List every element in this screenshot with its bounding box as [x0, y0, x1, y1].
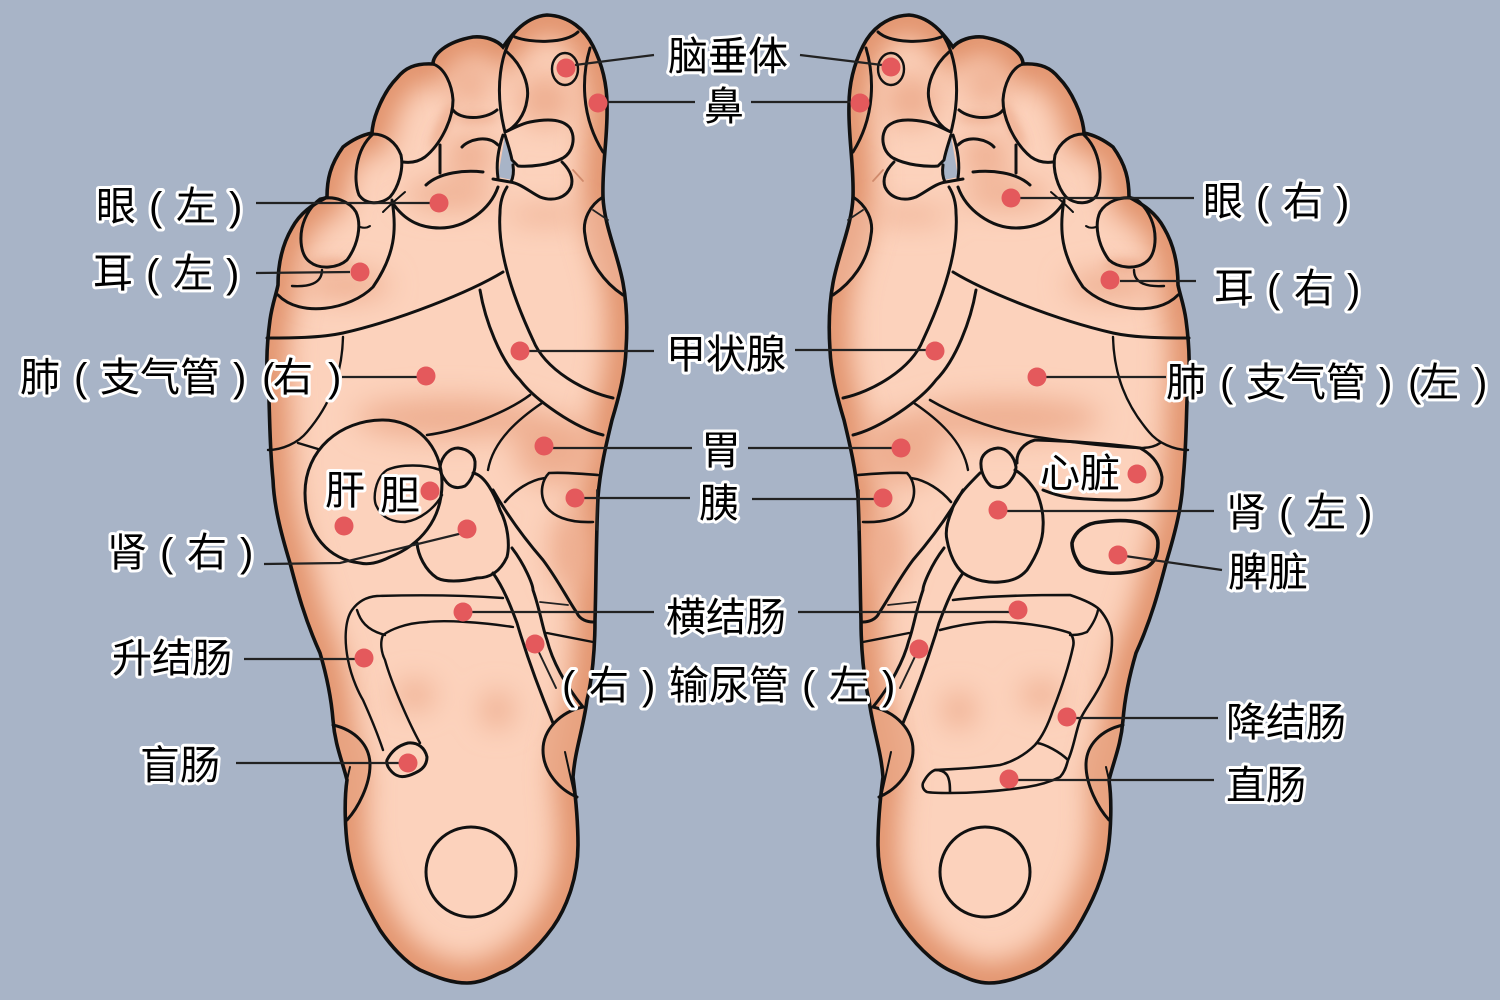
kidney right foot — [946, 470, 1043, 582]
label: lung right: ) — [233, 356, 246, 400]
label: ear left: ) — [226, 252, 239, 296]
label: ascending colon: 升结肠 — [112, 637, 232, 681]
label: lung right: ( — [74, 356, 88, 400]
label: gallbladder: 胆 — [380, 474, 420, 518]
label: kidney left: ( — [1279, 491, 1293, 535]
long kidney line — [493, 490, 593, 622]
big toe side arc fills — [586, 197, 623, 295]
label: kidney right: 右 — [187, 531, 227, 575]
toes — [453, 110, 497, 118]
label: liver: 肝 — [325, 469, 365, 513]
kidney left foot — [417, 473, 508, 581]
foot base mirrored — [829, 15, 1189, 983]
heart — [1017, 440, 1162, 500]
label: kidney right: ( — [160, 531, 174, 575]
label: thyroid: 甲状腺 — [666, 333, 786, 377]
heel circle — [426, 827, 516, 917]
heel side arc fill — [333, 725, 370, 820]
ureter lines — [493, 573, 553, 723]
label: lung left: 左 — [1419, 361, 1459, 405]
descending colon and rectum — [923, 595, 1112, 793]
label: ureter: 左 — [829, 664, 869, 708]
label: ureter: ( — [802, 664, 816, 708]
label: ear right: ) — [1347, 267, 1360, 311]
reflex points left foot — [334, 58, 608, 772]
label: ureter: ( — [562, 664, 576, 708]
label: eye right: 右 — [1283, 180, 1323, 224]
label: lung left: ) — [1474, 361, 1487, 405]
left foot — [236, 15, 695, 983]
label: descending colon: 降结肠 — [1226, 701, 1346, 745]
label: lung right: 右 — [273, 356, 313, 400]
colon thin lines — [540, 602, 568, 605]
label: cecum: 盲肠 — [140, 744, 220, 788]
small circle — [440, 448, 475, 488]
labels — [20, 35, 1487, 808]
label: nose: 鼻 — [704, 85, 744, 129]
reflex points right foot — [850, 58, 1146, 788]
label: ureter: ) — [882, 664, 895, 708]
liver — [305, 420, 442, 564]
label: kidney left: 肾 — [1226, 491, 1266, 535]
label: transverse colon: 横结肠 — [666, 596, 786, 640]
label: eye right: 眼 — [1203, 180, 1243, 224]
label: lung left: 肺 — [1166, 361, 1206, 405]
leader lines right — [748, 55, 1222, 780]
label: eye left: ) — [229, 185, 242, 229]
label: eye left: 眼 — [96, 185, 136, 229]
label: ureter: ) — [642, 664, 655, 708]
cecum — [387, 743, 427, 777]
label: eye left: ( — [149, 185, 163, 229]
label: ear right: 耳 — [1214, 267, 1254, 311]
lung lower line — [427, 395, 530, 435]
label: ear left: 耳 — [93, 252, 133, 296]
right foot — [748, 15, 1222, 983]
zone lines — [267, 272, 503, 338]
leader lines left — [236, 55, 695, 763]
label: lung left: ( — [1220, 361, 1234, 405]
label: kidney left: ) — [1359, 491, 1372, 535]
label: kidney right: ) — [240, 531, 253, 575]
label: lung right: ( — [262, 356, 276, 400]
label: rectum: 直肠 — [1226, 764, 1306, 808]
label: lung left: ( — [1408, 361, 1422, 405]
hole between toes — [498, 135, 514, 180]
label: lung right: 肺 — [20, 356, 60, 400]
label: pancreas: 胰 — [699, 482, 739, 526]
label: pituitary: 脑垂体 — [668, 35, 788, 79]
heel side arcs — [333, 725, 370, 820]
label: eye left: 左 — [176, 185, 216, 229]
transverse and ascending colon — [346, 595, 503, 750]
label: kidney right: 肾 — [107, 531, 147, 575]
label: ureter: 输尿管 — [669, 664, 789, 708]
label: ureter: 右 — [589, 664, 629, 708]
pancreas — [505, 478, 545, 502]
spleen — [1072, 521, 1158, 573]
label: spleen: 脾脏 — [1228, 551, 1308, 595]
label: ear left: ( — [146, 252, 160, 296]
label: eye right: ) — [1336, 180, 1349, 224]
label: lung left: 支气管 — [1246, 361, 1366, 405]
label: ear right: ( — [1267, 267, 1281, 311]
label: eye right: ( — [1256, 180, 1270, 224]
label: lung right: 支气管 — [100, 356, 220, 400]
lung lower line right — [930, 400, 1160, 448]
label: lung left: ) — [1379, 361, 1392, 405]
label: heart: 心脏 — [1040, 452, 1120, 496]
label: kidney left: 左 — [1306, 491, 1346, 535]
label: ear right: 右 — [1294, 267, 1334, 311]
big toe details — [515, 32, 578, 41]
label: stomach: 胃 — [701, 429, 741, 473]
foot base drawing — [267, 15, 627, 983]
stomach line — [488, 403, 542, 470]
outline — [267, 15, 627, 983]
heel side arc fill right — [543, 707, 583, 797]
gallbladder — [375, 466, 442, 522]
label: lung right: ) — [328, 356, 341, 400]
label: ear left: 左 — [173, 252, 213, 296]
